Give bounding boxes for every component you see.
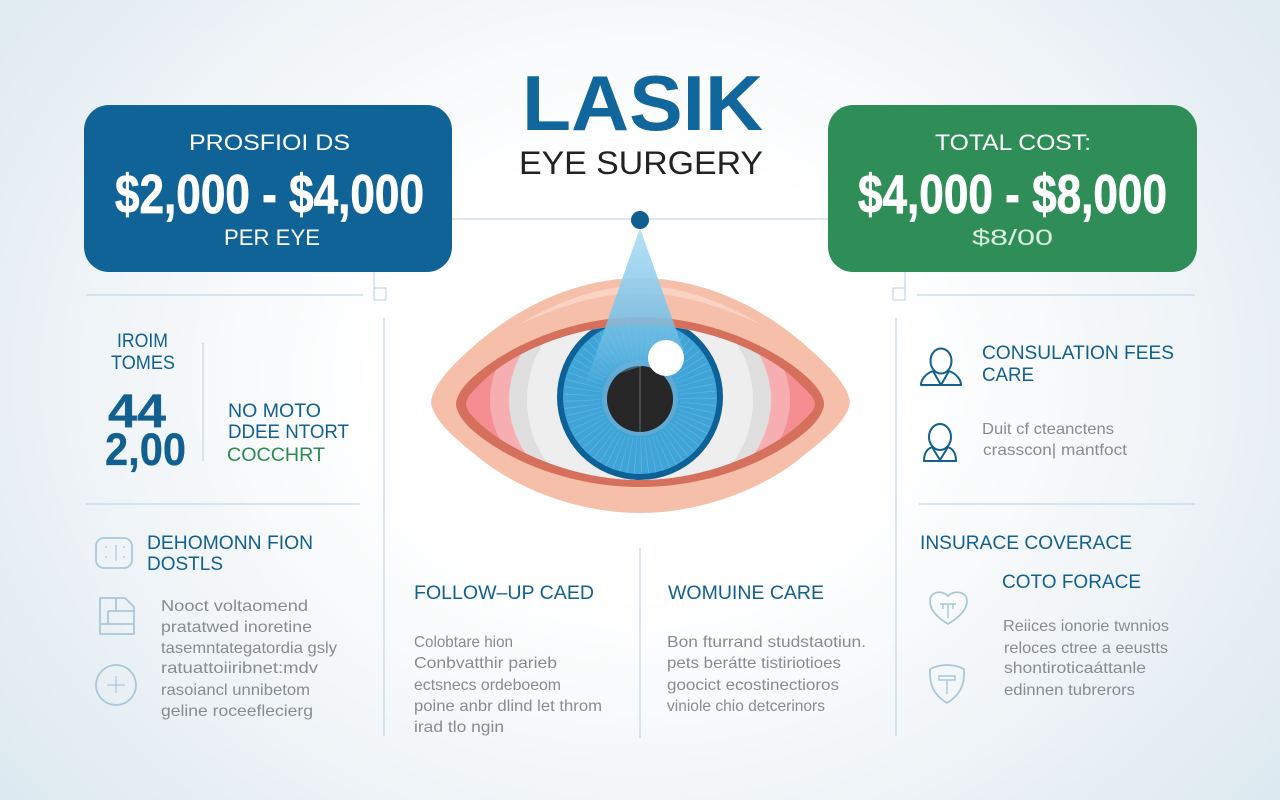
coverage paragraph: shontiroticaáttanle (1004, 660, 1146, 677)
follow-up paragraph: Conbvatthir parieb (414, 655, 557, 672)
coverage paragraph: Reiices ionorie twnnios (1003, 618, 1169, 635)
details paragraph: pratatwed inoretine (161, 619, 312, 636)
laser emitter dot (631, 211, 649, 229)
panel: womuine care: WOMUINE CARE (668, 583, 824, 604)
icon: shield (930, 665, 964, 703)
details paragraph: Nooct voltaomend (161, 598, 308, 615)
icon: person (921, 348, 961, 385)
panel: consultation fees (921, 343, 1174, 461)
total price range: $4,000 - $8,000 (858, 163, 1167, 225)
panel: total cost (828, 105, 1197, 272)
panel: price per eye: PER EYE (224, 225, 320, 250)
womuine care paragraph: viniole chio detcerinors (667, 698, 825, 715)
follow-up paragraph: irad tlo ngin (414, 719, 504, 736)
panel: price per eye: PROSFIOI DS (189, 130, 350, 155)
womuine care paragraph (667, 634, 866, 715)
follow-up paragraph: poine anbr dlind let throm (414, 698, 602, 715)
stat numbers: 44 (108, 384, 166, 437)
womuine care paragraph: goocict ecostinectioros (667, 677, 839, 694)
panel: insurance coverage (920, 533, 1169, 703)
eye illustration (431, 211, 850, 513)
panel: womuine care (667, 583, 866, 715)
details paragraph (161, 598, 337, 720)
panel: follow-up care (414, 583, 602, 736)
light reflection (648, 340, 684, 376)
panel: left stats: DDEE NTORT (228, 422, 349, 443)
laser beam (585, 228, 684, 385)
icon: card (96, 538, 132, 568)
coverage subheading: COTO FORACE (1002, 572, 1141, 593)
panel: left stats: TOMES (111, 353, 175, 374)
details heading: DEHOMONN FION (147, 533, 313, 554)
follow-up paragraph: ectsnecs ordeboeom (414, 677, 561, 694)
panel: total cost: TOTAL COST: (935, 130, 1091, 155)
consultation paragraph (982, 421, 1128, 459)
icon: person outline (924, 424, 956, 461)
panel: left stats: IROIM (117, 331, 168, 352)
icon: plus circle (96, 665, 136, 705)
details heading (147, 533, 313, 575)
consultation heading (982, 343, 1174, 386)
womuine care paragraph: Bon fturrand studstaotiun. (667, 634, 866, 651)
panel: total cost: $8/00 (972, 225, 1053, 250)
consultation heading: CONSULATION FEES (982, 343, 1174, 364)
details paragraph: tasemntategatordia gsly (161, 640, 337, 657)
panel: price per eye (84, 105, 452, 272)
icon: document (100, 598, 134, 634)
womuine care paragraph: pets berátte tistiriotioes (667, 655, 841, 672)
coverage paragraph (1003, 618, 1169, 699)
details paragraph: rasoiancl unnibetom (161, 682, 310, 699)
pupil (607, 366, 673, 432)
title (519, 59, 763, 181)
panel: left stats: COCCHRT (227, 445, 325, 466)
price range per eye: $2,000 - $4,000 (115, 163, 424, 225)
coverage paragraph: edinnen tubrerors (1004, 682, 1135, 699)
title: LASIK (522, 59, 763, 147)
panel: left stats: 2,00 (105, 424, 186, 475)
details paragraph: geline roceeflecierg (161, 703, 313, 720)
panel: follow-up care: FOLLOW–UP CAED (414, 583, 594, 604)
subtitle: EYE SURGERY (519, 145, 763, 181)
consultation heading: CARE (982, 365, 1034, 386)
details paragraph: ratuattoiiribnet:mdv (161, 660, 318, 677)
details heading: DOSTLS (147, 554, 223, 575)
consultation paragraph: Duit cf cteanctens (982, 421, 1114, 438)
coverage paragraph: reloces ctree a eeustts (1004, 640, 1168, 657)
follow-up paragraph (414, 634, 602, 736)
consultation paragraph: crasscon| mantfoct (983, 442, 1128, 459)
stat description: NO MOTO (228, 401, 321, 422)
panel: left details (96, 533, 337, 720)
panel: left stats (105, 331, 349, 475)
panel: insurance coverage: INSURACE COVERACE (920, 533, 1132, 554)
follow-up paragraph: Colobtare hion (414, 634, 513, 651)
icon: heart (930, 592, 967, 624)
